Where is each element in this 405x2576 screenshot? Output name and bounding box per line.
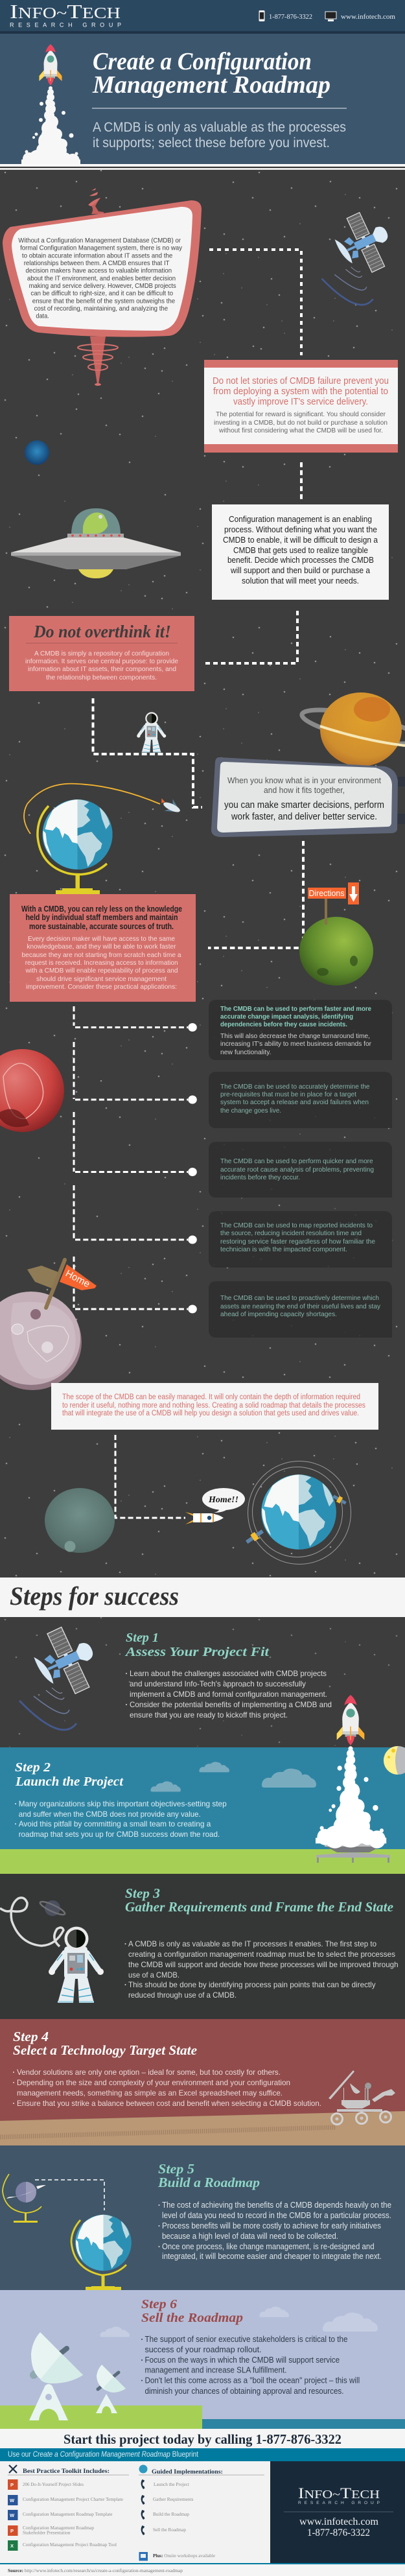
step 1 heading xyxy=(124,1631,270,1659)
contact details: 1-877-876-3322 xyxy=(269,13,312,21)
call to action xyxy=(0,2429,405,2448)
step 3 text xyxy=(124,1939,399,2000)
footer contact: www.infotech.com xyxy=(299,2516,379,2527)
step 1 text: and understand Info-Tech's approach to successfully xyxy=(130,1679,306,1688)
speech bubble: intro xyxy=(3,188,202,386)
panel: root cause analysis: accurate root cause analysis of problems, preventing xyxy=(220,1166,374,1174)
step 6 text: Don't let this come across as a "boil the ocean" project – this will xyxy=(145,2376,360,2385)
blueprint band: Use our Create a Configuration Management Roadmap Blueprint xyxy=(8,2451,199,2459)
step 2 text: Avoid this pitfall by committing a small team to creating a xyxy=(19,1819,211,1828)
knowledge body: Every decision maker will have access to the same xyxy=(28,935,175,943)
knowledge body: improvement. Consider these practical applications: xyxy=(26,983,177,991)
callout body: investing in a CMDB, but do not build or purchase a solution xyxy=(214,419,388,427)
panel: do not let failure stories xyxy=(204,360,398,453)
column: best practice toolkit: Stakeholder Presentation xyxy=(23,2530,71,2535)
intro text: Without a Configuration Management Database (CMDB) or xyxy=(18,237,181,244)
title: Management Roadmap xyxy=(92,71,330,99)
title: Create a Configuration xyxy=(93,48,312,75)
column: best practice toolkit: Configuration Management Project Roadmap Tool xyxy=(23,2542,117,2547)
icon: astronaut with tether xyxy=(0,1898,104,2003)
step 6 heading xyxy=(141,2297,243,2325)
step 2 text: Many organizations skip this important objectives-setting step xyxy=(19,1799,227,1808)
panel: enabling process xyxy=(212,504,389,600)
step 5 text xyxy=(158,2201,391,2261)
icon: launching rocket xyxy=(316,1695,386,1849)
dashed path: overthink to sign xyxy=(93,698,202,807)
step 3 text: A CMDB is only as valuable as the IT processes it enables. The first step to xyxy=(128,1939,376,1948)
speech bubble: home: Home!! xyxy=(208,1495,238,1505)
column: guided implementations xyxy=(139,2465,264,2561)
speech bubble: home xyxy=(202,1488,245,1513)
blueprint band xyxy=(0,2448,405,2461)
icon: large radar dish xyxy=(29,2332,83,2420)
step 2 heading: Launch the Project xyxy=(15,1775,124,1789)
overthink body: the relationship between components. xyxy=(46,674,157,681)
column: best practice toolkit: W xyxy=(10,2512,15,2518)
column: best practice toolkit: 206 Do-It-Yourself Project Slides xyxy=(23,2482,84,2487)
callout: sign board: you can make smarter decisions, perform xyxy=(224,800,384,810)
column: guided implementations: Launch the Project xyxy=(154,2482,189,2487)
step 3 heading: Step 3 xyxy=(125,1885,160,1901)
dashed connector with nodes xyxy=(74,1006,197,1314)
step 6 heading: Sell the Roadmap xyxy=(141,2311,243,2325)
header bar xyxy=(0,0,405,34)
column: best practice toolkit: Configuration Management Project Charter Template xyxy=(23,2497,123,2502)
step 1 text: implement a CMDB and formal configuration management. xyxy=(130,1690,327,1699)
step 3 heading xyxy=(125,1885,393,1915)
panel: root cause analysis: The CMDB can be used to perform quicker and more xyxy=(220,1157,373,1165)
step 3 text: use of a CMDB. xyxy=(128,1970,179,1979)
source line: Source: http://www.infotech.com/research/ss/create-a-configuration-management-roadmap xyxy=(8,2568,183,2573)
panel: incident mapping: restoring service faster regardless of how familiar the xyxy=(220,1238,375,1246)
panel: enabling process: solution that will meet your needs. xyxy=(242,576,359,585)
icon: large satellite xyxy=(19,1620,106,1730)
knowledge body: request is received. Increasing access to information xyxy=(25,959,178,967)
step 2 heading: Step 2 xyxy=(15,1760,51,1775)
panel: step 1 xyxy=(0,1617,405,1747)
panel: step 3 xyxy=(0,1874,405,2019)
step 5 heading xyxy=(157,2161,260,2190)
step 3 text: reduced through use of a CMDB. xyxy=(128,1991,237,2000)
logo: RESEARCH GROUP xyxy=(10,22,121,29)
step 6 text: management and increase SLA fulfillment. xyxy=(145,2365,286,2374)
title xyxy=(92,48,330,99)
panel: step 4 xyxy=(0,2019,405,2145)
icon: large desk globe xyxy=(71,2215,132,2290)
step 2 heading xyxy=(15,1760,124,1789)
callout heading: Do not let stories of CMDB failure prevent you xyxy=(213,376,389,386)
column: guided implementations: Guided Implementations: xyxy=(152,2469,223,2476)
step 4 heading xyxy=(13,2029,197,2058)
dashed path: to enabling box xyxy=(300,462,303,499)
panel: enabling process: Configuration management is an enabling xyxy=(229,514,372,524)
icon: tools xyxy=(9,2465,17,2473)
knowledge body: knowledgebase, and they will be able to work faster xyxy=(27,943,176,951)
knowledge heading xyxy=(21,904,182,931)
column: best practice toolkit: W xyxy=(10,2498,15,2503)
callout body: The potential for reward is significant. You should consider xyxy=(216,410,386,418)
icon: small planet globe xyxy=(3,2174,46,2223)
panel: incident mapping xyxy=(209,1211,392,1268)
step 4 text: Ensure that you strike a balance between cost and benefit when selecting a CMDB solution. xyxy=(17,2099,321,2108)
heading band: steps for success: Steps for success xyxy=(10,1581,179,1611)
callout heading: from deploying a system with the potential to xyxy=(213,386,388,397)
step 5 text: integrated, it will become easier and cheaper to integrate the next. xyxy=(162,2252,382,2261)
step 5 heading: Step 5 xyxy=(158,2161,194,2177)
dashed path: intro to failure box xyxy=(209,250,301,355)
panel: scope callout xyxy=(51,1383,378,1430)
panel: incident mapping: the source, reducing incident resolution time and xyxy=(220,1229,362,1237)
contact details xyxy=(259,10,395,21)
panel: step 5 xyxy=(0,2145,405,2290)
icon: rover xyxy=(329,2070,395,2124)
callout heading xyxy=(213,376,389,407)
column: best practice toolkit xyxy=(8,2465,129,2551)
dashed path: globe to globe xyxy=(35,2180,104,2210)
column: best practice toolkit: Configuration Management Roadmap Template xyxy=(23,2512,113,2517)
panel: change impact analysis: dependencies before they cause incidents. xyxy=(220,1021,347,1028)
icon: globe xyxy=(139,2465,148,2473)
column: best practice toolkit: Best Practice Toolkit Includes: xyxy=(23,2468,110,2475)
column: best practice toolkit: Configuration Management Roadmap xyxy=(23,2525,95,2531)
step 1 heading: Assess Your Project Fit xyxy=(124,1645,270,1659)
panel: change impact analysis xyxy=(209,1000,392,1060)
step 4 heading: Step 4 xyxy=(13,2029,49,2044)
step 1 heading: Step 1 xyxy=(126,1631,159,1645)
intro text: formal Configuration Management system, there is no way xyxy=(20,244,183,252)
intro text: can be difficult to right-size, and it can be difficult to xyxy=(30,290,173,298)
column: guided implementations: Plus: Onsite workshops available xyxy=(153,2553,215,2558)
rover tracks xyxy=(0,2127,336,2137)
icon: green planet with directions sign xyxy=(299,882,373,986)
step 2 text: roadmap that sets you up for CMDB success down the road. xyxy=(19,1830,220,1839)
step 6 text xyxy=(141,2335,360,2396)
intro text: cost of recording, maintaining, and analyzing the xyxy=(34,305,168,313)
icon: small astronaut xyxy=(137,712,166,752)
knowledge body: with a CMDB will enable repeatability of process and xyxy=(25,967,178,975)
callout heading: vastly improve IT's service delivery. xyxy=(233,397,368,407)
step 5 text: Once one process, like change management, is re-designed and xyxy=(162,2242,375,2251)
overthink body: information about IT assets, their components, and xyxy=(28,665,176,673)
knowledge heading: held by individual staff members and maintain xyxy=(26,913,178,922)
step 4 text xyxy=(13,2068,321,2108)
panel: change impact analysis: increasing IT's ability to meet business demands for xyxy=(220,1040,371,1048)
step 1 text: Consider the potential benefits of implementing a CMDB and xyxy=(130,1700,332,1709)
subtitle: A CMDB is only as valuable as the processes xyxy=(93,120,346,135)
step 1 text: Learn about the challenges associated with CMDB projects xyxy=(130,1669,327,1678)
panel: scope callout: to render it useful, nothing more and nothing less. Creating a solid roadmap that details the processes xyxy=(62,1402,365,1410)
column: guided implementations: Sell the Roadmap xyxy=(153,2527,186,2533)
step 6 text: success of your roadmap rollout. xyxy=(145,2345,262,2354)
heading band: steps for success xyxy=(0,1578,405,1617)
icon: grey moon xyxy=(45,1488,115,1553)
icon: rocket going home xyxy=(185,1512,224,1524)
step 1 text xyxy=(126,1669,332,1719)
intro text: relationships between them. A CMDB ensures that IT xyxy=(24,259,170,267)
footer panel xyxy=(0,2461,270,2563)
icon: moon xyxy=(384,1746,405,1775)
panel: release prerequisites: The CMDB can be used to accurately determine the xyxy=(220,1083,370,1091)
panel: enabling process: CMDB that gets used to realize tangible xyxy=(233,545,368,555)
clouds xyxy=(100,2306,378,2337)
contact details: www.infotech.com xyxy=(341,13,395,21)
step 6 heading: Step 6 xyxy=(141,2297,177,2311)
dashed path: scope to home xyxy=(115,1435,185,1518)
footer logo: INFO~ TECH xyxy=(298,2485,380,2501)
intro text: ensure that the benefit of the system outweighs the xyxy=(32,297,175,305)
knowledge heading: more sustainable, accurate sources of truth. xyxy=(29,922,174,931)
overthink body: information. It serves one central purpose: to provide xyxy=(25,657,178,665)
column: guided implementations: Build the Roadmap xyxy=(153,2512,189,2517)
callout body: without first considering what the CMDB will be used for. xyxy=(218,427,383,434)
dashed path: to overthink box xyxy=(204,611,297,663)
panel: contact block xyxy=(270,2461,405,2563)
panel: asset lifecycle xyxy=(209,1281,392,1338)
overthink body xyxy=(25,650,178,681)
step 5 text: Process benefits will be more costly to achieve for early initiatives xyxy=(162,2221,381,2230)
intro text: decision makers have access to valuable information xyxy=(26,267,172,275)
panel: asset lifecycle: assets are nearing the end of their useful lives and stay xyxy=(220,1303,381,1310)
panel: asset lifecycle: ahead of impending capacity shortages. xyxy=(220,1310,337,1318)
icon: distant planet xyxy=(39,1900,66,1917)
panel: asset lifecycle: The CMDB can be used to proactively determine which xyxy=(220,1294,379,1302)
step 4 text: Depending on the size and complexity of your environment and your configuration xyxy=(17,2078,290,2087)
dashed path: sign to green planet xyxy=(208,841,303,948)
step 6 text: diminish your chances of obtaining approval and resources. xyxy=(145,2387,343,2396)
icon: asteroid with home sign xyxy=(0,1260,97,1390)
bubble tail with rings xyxy=(78,337,118,386)
panel: release prerequisites xyxy=(209,1072,392,1128)
intro text: data. xyxy=(36,313,49,320)
column: best practice toolkit: P xyxy=(10,2482,14,2488)
step 5 heading: Build a Roadmap xyxy=(157,2175,260,2190)
space background xyxy=(0,170,405,1578)
overthink body: A CMDB is simply a repository of configuration xyxy=(34,650,169,657)
call to action: Start this project today by calling 1-877-876-3322 xyxy=(64,2431,341,2447)
step 2 text: and suffer when the CMDB does not provide any value. xyxy=(19,1810,201,1819)
panel: root cause analysis xyxy=(209,1142,392,1198)
icon: rocket with orbit arc xyxy=(24,784,183,834)
icon: workshop xyxy=(139,2552,148,2561)
step 2 text xyxy=(15,1799,227,1839)
callout: sign board: When you know what is in your environment xyxy=(227,775,381,785)
column: best practice toolkit: X xyxy=(10,2543,14,2549)
step 3 text: This should be done by identifying process pain points that can be directly xyxy=(128,1980,376,1989)
panel: enabling process: process. Without defining what you want the xyxy=(224,525,377,534)
step 5 text: level of data you need to record in the CMDB for a particular process. xyxy=(162,2211,391,2220)
callout: sign board: work faster, and deliver better service. xyxy=(231,812,377,822)
icon: small radar dish xyxy=(96,2365,126,2413)
logo: INFO~ TECH xyxy=(10,0,121,23)
subtitle xyxy=(93,120,346,150)
icon: red planet xyxy=(0,1049,64,1132)
panel: change impact analysis: This will also decrease the change turnaround time, xyxy=(220,1032,370,1040)
step 4 heading: Select a Technology Target State xyxy=(13,2042,197,2058)
callout: sign board: and how it fits together, xyxy=(264,785,345,795)
column: guided implementations: Gather Requirements xyxy=(153,2497,194,2502)
panel: do not overthink it xyxy=(9,616,194,691)
knowledge heading: With a CMDB, you can rely less on the knowledge xyxy=(21,904,182,914)
panel: change impact analysis: accurate change impact analysis, identifying xyxy=(220,1013,353,1021)
knowledge body: should drive significant service management xyxy=(36,975,167,983)
source line xyxy=(0,2563,405,2576)
icon: desk globe xyxy=(38,799,112,894)
step 3 text: creating a configuration management roadmap must be to select the processes xyxy=(128,1950,395,1959)
panel: enabling process: will support and then build or purchase a xyxy=(230,565,371,575)
panel: enabling process: CMDB to enable, it will be difficult to design a xyxy=(223,535,378,545)
intro text xyxy=(18,237,183,320)
panel: incident mapping: technician is with the impacted component. xyxy=(220,1246,347,1253)
step 5 text: because a high level of data will need to be collected. xyxy=(162,2232,338,2241)
step 4 text: management needs, something as simple as an Excel spreadsheet may suffice. xyxy=(17,2088,283,2097)
callout: sign board xyxy=(211,757,405,837)
panel: enabling process: benefit. Decide which processes the CMDB xyxy=(227,555,374,565)
overthink heading: Do not overthink it! xyxy=(33,622,171,641)
step 5 text: The cost of achieving the benefits of a CMDB depends heavily on the xyxy=(162,2201,391,2210)
knowledge body xyxy=(22,935,181,991)
footer contact: 1-877-876-3322 xyxy=(307,2527,370,2538)
callout body xyxy=(214,410,388,434)
footer logo: RESEARCH GROUP xyxy=(298,2501,380,2505)
hero panel xyxy=(0,34,405,168)
icon: blue planet xyxy=(25,440,49,465)
icon: alien in UFO xyxy=(11,508,181,578)
panel: change impact analysis: new functionality. xyxy=(220,1048,271,1056)
panel: scope callout: that will integrate the use of a CMDB will help you design a solution that gets used and drives value. xyxy=(62,1410,359,1417)
subtitle: it supports; select these before you invest. xyxy=(93,136,330,150)
panel: incident mapping: The CMDB can be used to map reported incidents to xyxy=(220,1222,373,1229)
clouds xyxy=(150,1762,316,1791)
step 6 text: The support of senior executive stakeholders is critical to the xyxy=(145,2335,348,2344)
panel: change impact analysis: The CMDB can be used to perform faster and more xyxy=(220,1005,371,1013)
column: best practice toolkit: P xyxy=(10,2528,14,2534)
icon: launch pad xyxy=(316,1843,390,1863)
icon: ringed orange planet xyxy=(299,692,405,766)
intro text: to obtain accurate information about IT assets and the xyxy=(22,252,172,259)
knowledge body: because they are not starting from scratch each time a xyxy=(22,951,181,959)
icon: satellite xyxy=(321,206,399,305)
panel: release prerequisites: system to accept a release and avoid failures when xyxy=(220,1098,369,1106)
icon: earth with orbiting satellites xyxy=(244,1461,351,1564)
intro text: about the IT environment, and enables better decision xyxy=(27,274,176,282)
directions label: Directions xyxy=(308,888,345,898)
step 1 text: ensure that you are ready to kickoff this project. xyxy=(130,1710,288,1719)
step 6 text: Focus on the ways in which the CMDB will support service xyxy=(145,2356,340,2365)
step 4 text: Vendor solutions are only one option – ideal for some, but too costly for others. xyxy=(17,2068,281,2077)
panel: scope callout: The scope of the CMDB can be easily managed. It will only contain the depth of information required xyxy=(62,1393,360,1401)
footer contact xyxy=(299,2516,379,2538)
intro text: making and service delivery. However, CMDB projects xyxy=(29,282,176,290)
home label: Home xyxy=(64,1268,91,1290)
panel: step 2 xyxy=(0,1695,405,1874)
panel: step 6 xyxy=(0,2290,405,2429)
icon: launching rocket with smoke xyxy=(21,44,80,168)
step 3 heading: Gather Requirements and Frame the End State xyxy=(125,1899,393,1915)
panel: rely less on knowledge xyxy=(10,894,196,1002)
panel: root cause analysis: incidents before they occur. xyxy=(220,1174,300,1181)
panel: release prerequisites: the change goes live. xyxy=(220,1107,281,1115)
panel: release prerequisites: pre-requisites that must be in place for a target xyxy=(220,1091,356,1098)
step 3 text: the CMDB will support and decide how these processes will be improved through xyxy=(128,1960,399,1969)
